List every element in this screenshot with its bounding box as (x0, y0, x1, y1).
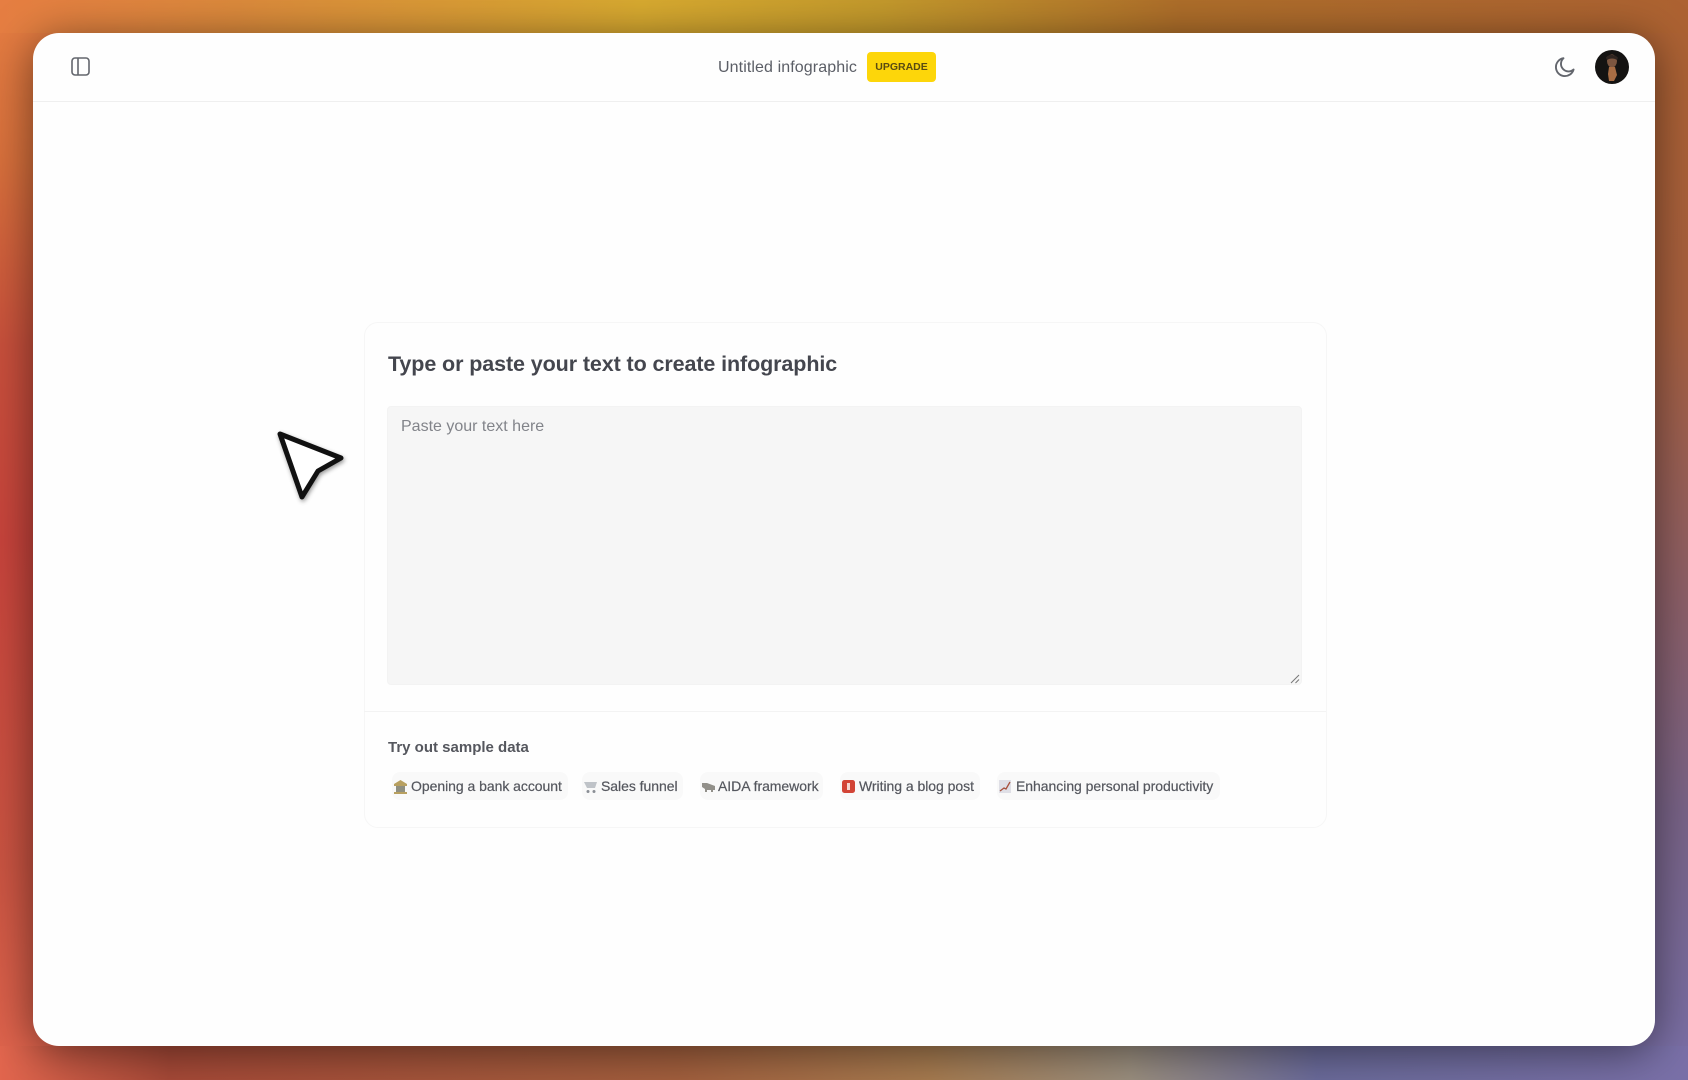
icon: chart (999, 780, 1011, 793)
card heading: Type or paste your text to create infographic (388, 352, 837, 376)
icon: cart (584, 782, 597, 793)
icon: sidebar toggle (71, 57, 90, 76)
card divider (364, 711, 1326, 712)
sample chip: sales funnel (582, 772, 683, 800)
sample data heading: Try out sample data (388, 739, 529, 756)
icon: arrow cursor (276, 431, 346, 504)
chip label: blog post: Writing a blog post (859, 778, 974, 794)
icon: bank (394, 780, 407, 794)
sample chip: AIDA (700, 772, 823, 800)
sample chip: productivity (997, 772, 1220, 800)
chip label: sales funnel: Sales funnel (601, 778, 678, 794)
panel: text input card (364, 322, 1327, 828)
sample chip: blog post (840, 772, 980, 800)
text area (387, 406, 1302, 685)
upgrade badge: UPGRADE (875, 61, 928, 73)
icon: dark mode moon (1555, 57, 1574, 77)
sample chip: bank account (392, 772, 568, 800)
placeholder text: Paste your text here (401, 418, 544, 435)
chip label: productivity: Enhancing personal productivity (1016, 778, 1213, 794)
icon: red B (842, 780, 855, 793)
icon: resize grip (1290, 674, 1300, 684)
upgrade badge (867, 52, 936, 82)
document title: Untitled infographic (718, 59, 857, 76)
chip label: bank account: Opening a bank account (411, 778, 562, 794)
chip label: AIDA: AIDA framework (718, 778, 819, 794)
user avatar (1595, 50, 1629, 84)
icon: lion (702, 783, 715, 792)
header divider (33, 101, 1655, 102)
